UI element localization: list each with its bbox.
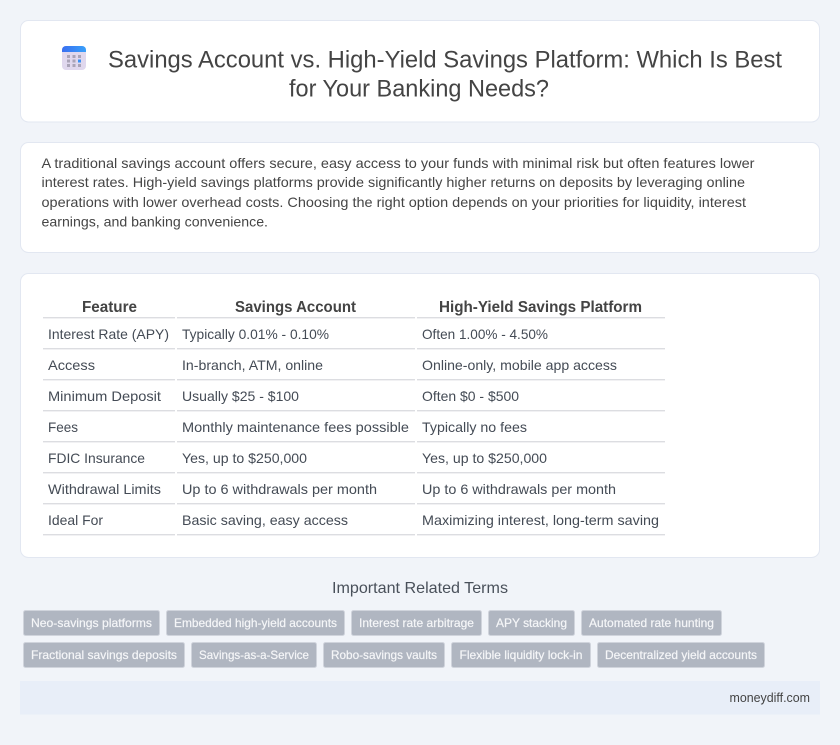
row: fees: Fees [48,419,78,435]
row: access: Access [48,357,95,373]
tag: Fractional savings deposits [31,648,177,662]
tag: Flexible liquidity lock-in [460,648,582,662]
row: interest rate [48,326,548,342]
text block: intro paragraph: operations with lower overhead costs. Choosing the right option depends on your priorities for liquidity, interest [42,194,746,210]
text block: intro paragraph: earnings, and banking convenience. [42,214,268,230]
panel: title card [20,20,820,122]
row: FDIC insurance: Yes, up to $250,000 [182,450,307,466]
title: for Your Banking Needs? [289,76,549,102]
tag: Decentralized yield accounts [605,648,757,662]
row: minimum deposit: Minimum Deposit [48,388,161,404]
footer: moneydiff.com [730,690,810,705]
tag [598,642,764,668]
row: fees [48,419,527,435]
row: interest rate: Typically 0.01% - 0.10% [182,326,329,342]
tag [24,642,184,668]
tag: Savings-as-a-Service [199,648,309,662]
row: interest rate: Interest Rate (APY) [48,326,169,342]
panel: intro text [20,142,820,252]
text block: intro paragraph: interest rates. High-yield savings platforms provide significantly higher returns on deposits by leveraging online [42,174,745,190]
row: minimum deposit: Usually $25 - $100 [182,388,299,404]
row: ideal for [48,512,659,528]
row: ideal for: Ideal For [48,512,103,528]
title [108,46,782,102]
tag [166,610,344,636]
row: access: Online-only, mobile app access [422,357,617,373]
tag [582,610,722,636]
tag [352,610,482,636]
row: minimum deposit [48,388,519,404]
row: minimum deposit: Often $0 - $500 [422,388,519,404]
table header: Savings Account [235,299,357,316]
panel: comparison table [20,274,820,558]
tag [324,642,444,668]
table header: High-Yield Savings Platform [439,299,642,316]
tag: Robo-savings vaults [331,648,437,662]
tag: Automated rate hunting [589,616,714,630]
row: access: In-branch, ATM, online [182,357,323,373]
row: fees: Monthly maintenance fees possible [182,419,409,435]
row: withdrawal limits: Up to 6 withdrawals per month [422,481,616,497]
tag [24,610,160,636]
tag [192,642,316,668]
row: access [48,357,617,373]
row: withdrawal limits: Withdrawal Limits [48,481,161,497]
tag: APY stacking [496,616,567,630]
row: ideal for: Maximizing interest, long-term saving [422,512,659,528]
tag: Neo-savings platforms [31,616,152,630]
tag [488,610,574,636]
table header: Feature [82,299,137,316]
heading: related terms: Important Related Terms [332,580,508,597]
table header [82,299,642,316]
tag: Interest rate arbitrage [359,616,474,630]
row: interest rate: Often 1.00% - 4.50% [422,326,548,342]
text block: intro paragraph: A traditional savings account offers secure, easy access to your funds with minimal risk but often features lower [42,155,755,171]
row: FDIC insurance: Yes, up to $250,000 [422,450,547,466]
row: FDIC insurance: FDIC Insurance [48,450,145,466]
text block: intro paragraph [42,155,755,230]
row: withdrawal limits [48,481,616,497]
row: fees: Typically no fees [422,419,527,435]
row: FDIC insurance [48,450,547,466]
title: Savings Account vs. High-Yield Savings Platform: Which Is Best [108,46,782,74]
row: withdrawal limits: Up to 6 withdrawals per month [182,481,377,497]
tag [452,642,590,668]
icon: calendar [62,46,86,70]
tag: Embedded high-yield accounts [174,616,337,630]
tags: related terms [24,610,764,668]
row: ideal for: Basic saving, easy access [182,512,348,528]
footer [20,681,820,714]
